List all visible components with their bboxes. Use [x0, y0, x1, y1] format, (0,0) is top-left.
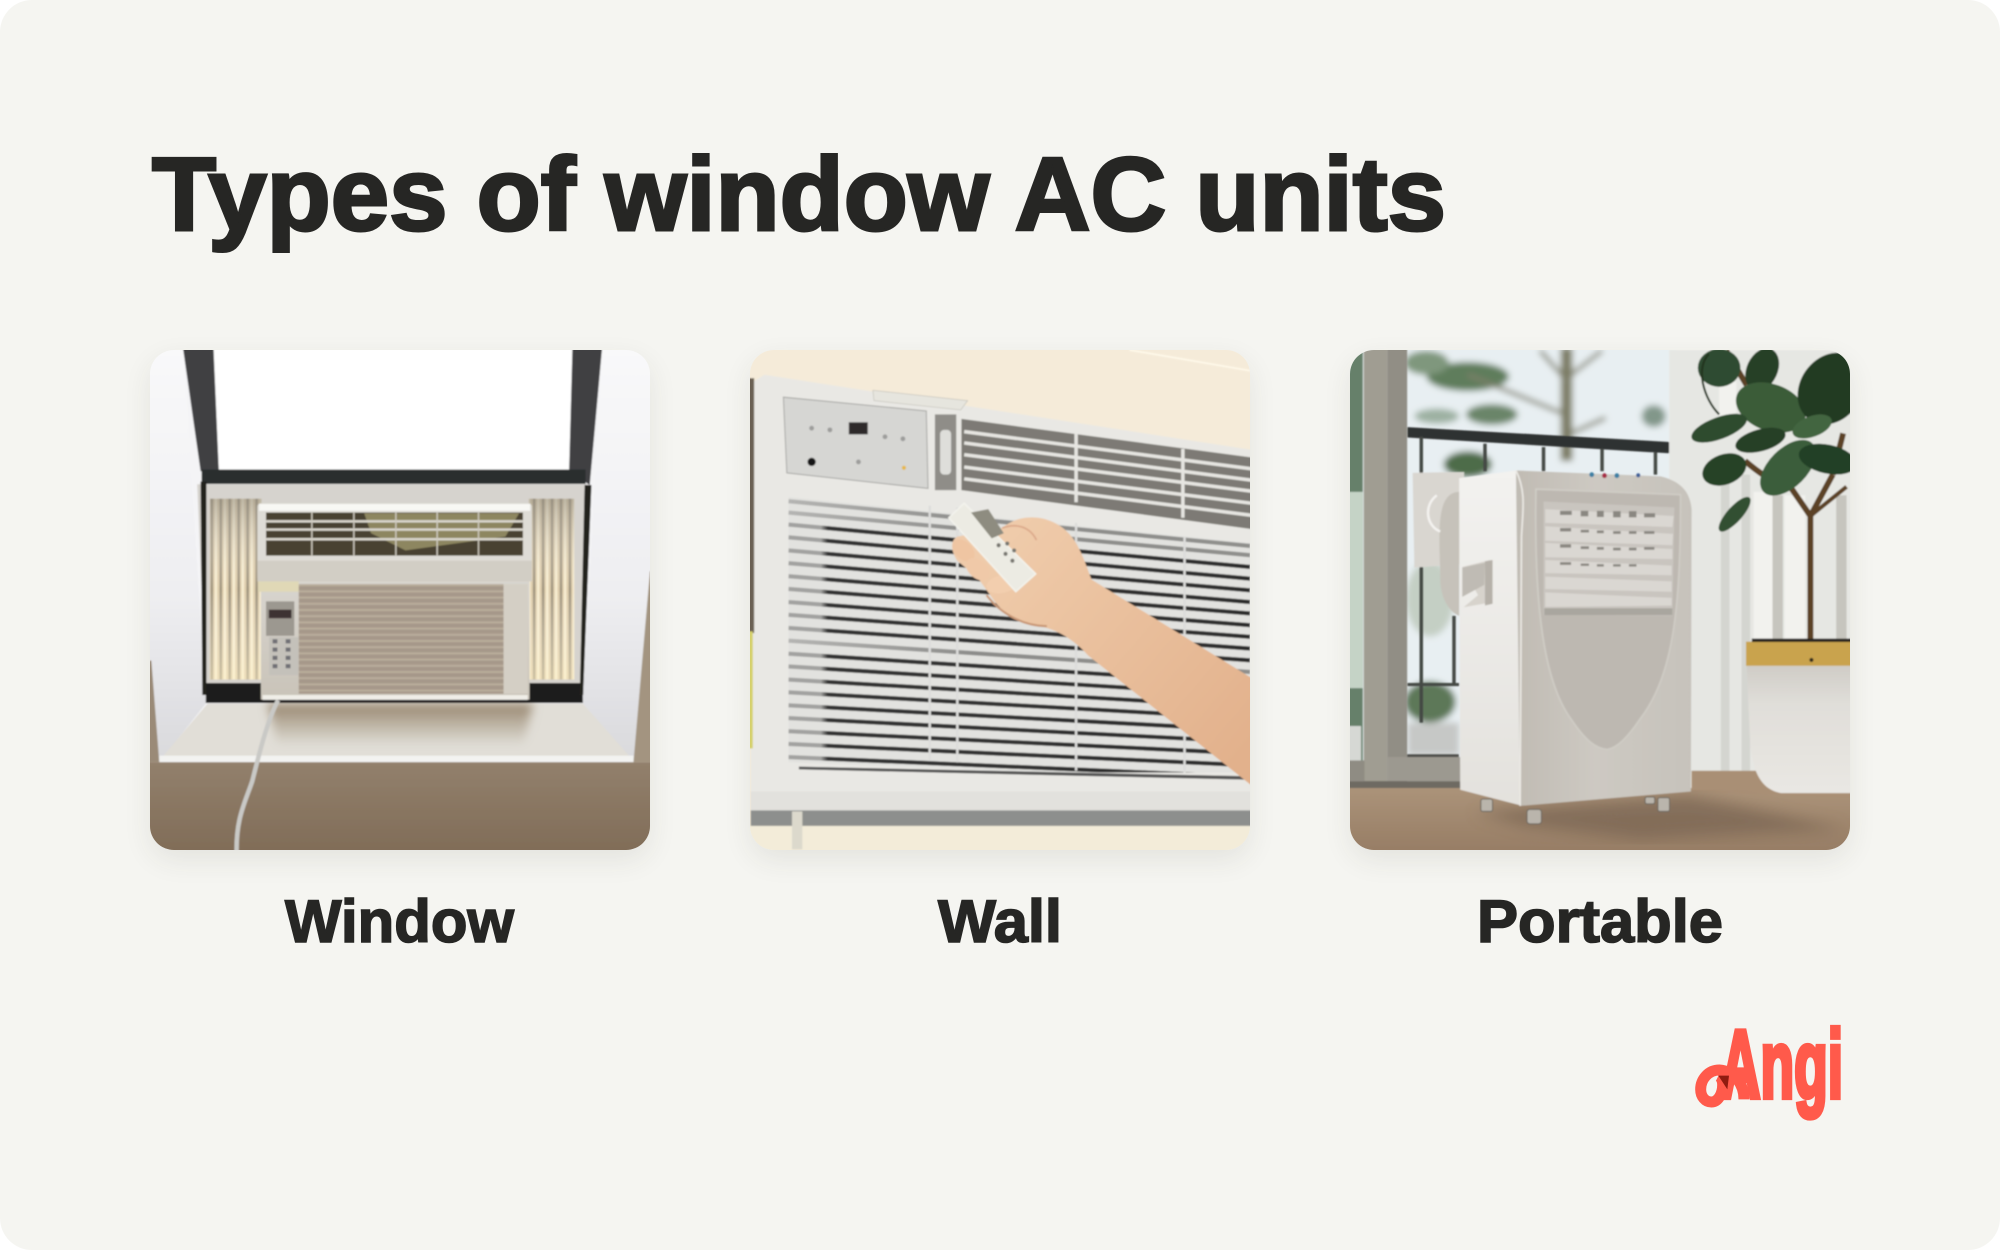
curtain	[1669, 350, 1857, 772]
panel: portable unit photo	[1350, 350, 1850, 850]
left window pane	[1344, 344, 1363, 762]
window frame	[1364, 344, 1387, 785]
right reveal	[583, 344, 657, 762]
cord	[237, 700, 278, 857]
plant stem	[1726, 351, 1843, 640]
leaves	[1688, 340, 1878, 536]
railing	[1408, 427, 1669, 453]
wall	[744, 344, 1257, 857]
upper vent	[961, 419, 1257, 530]
front panel oval	[1536, 489, 1681, 749]
label: Window: Window	[285, 888, 514, 955]
label: Portable: Portable	[1477, 888, 1723, 955]
unit	[257, 503, 532, 581]
buttons on top	[1589, 472, 1594, 477]
panel: window unit photo	[150, 350, 650, 850]
wall below	[144, 762, 657, 857]
panel	[783, 397, 928, 488]
sill	[159, 704, 633, 760]
vent	[1544, 502, 1674, 616]
frame	[182, 344, 219, 471]
handle	[1462, 560, 1493, 607]
swing knob	[935, 414, 956, 490]
unit side	[1459, 471, 1520, 805]
sky	[209, 344, 578, 473]
trim	[1129, 350, 1250, 371]
controls	[266, 601, 294, 636]
arm and hand	[952, 517, 1257, 790]
label: Wall: Wall	[938, 888, 1062, 955]
left reveal	[144, 344, 206, 762]
logo: Angi: Angi	[1721, 1010, 1843, 1118]
pot	[1747, 666, 1857, 793]
remote	[949, 503, 1036, 592]
outdoor background	[1344, 344, 1674, 791]
title: Types of window AC units	[152, 137, 1446, 253]
wheels	[1481, 797, 1670, 824]
panel: wall unit photo	[750, 350, 1250, 850]
wall	[144, 344, 657, 857]
unit front	[1516, 471, 1692, 806]
exhaust duct	[1413, 472, 1464, 568]
body	[751, 375, 1257, 812]
lower louvers	[789, 497, 1257, 781]
floor	[1344, 788, 1857, 857]
